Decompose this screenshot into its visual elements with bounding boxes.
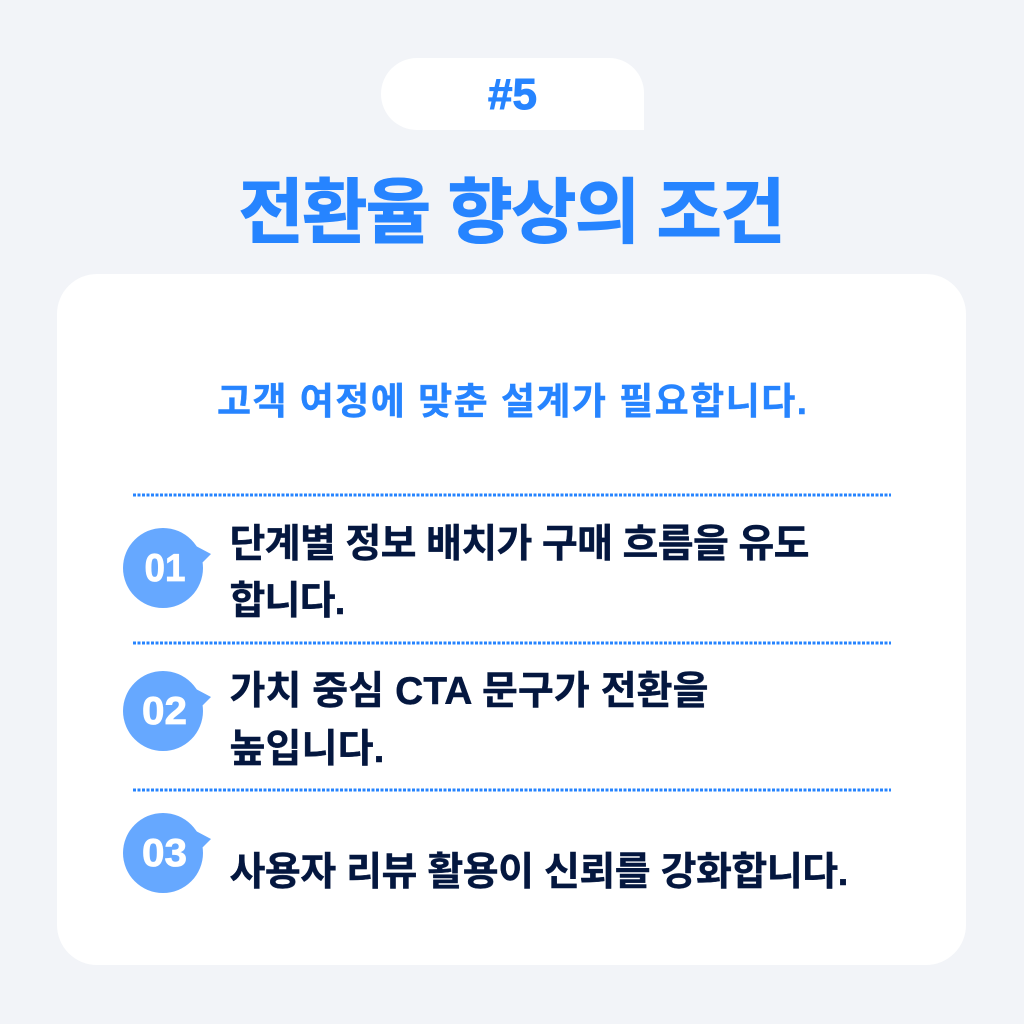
- item 01 text: 단계별 정보 배치가 구매 흐름을 유도: [230, 523, 810, 566]
- title: 전환율 향상의 조건: [238, 174, 786, 253]
- item 02 text: 높입니다.: [230, 728, 384, 771]
- icon: number bubble 01: 01: [144, 547, 186, 590]
- icon: number bubble 01: [123, 528, 211, 608]
- panel: main card: [57, 274, 966, 965]
- subtitle: 고객 여정에 맞춘 설계가 필요합니다.: [217, 381, 807, 422]
- icon: number bubble 03: 03: [142, 832, 187, 875]
- icon: number bubble 02: 02: [142, 690, 187, 733]
- item 02: [123, 670, 708, 771]
- item 03: [123, 813, 848, 894]
- item 02 text: 가치 중심 CTA 문구가 전환을: [230, 670, 708, 713]
- item 01: [123, 523, 810, 623]
- icon: number bubble 03: [123, 813, 211, 893]
- icon: number bubble 02: [123, 671, 211, 751]
- item 03 text: 사용자 리뷰 활용이 신뢰를 강화합니다.: [230, 851, 848, 894]
- tag badge: #5: #5: [488, 70, 537, 119]
- tag badge: #5: [381, 58, 644, 130]
- item 01 text: 합니다.: [230, 580, 346, 623]
